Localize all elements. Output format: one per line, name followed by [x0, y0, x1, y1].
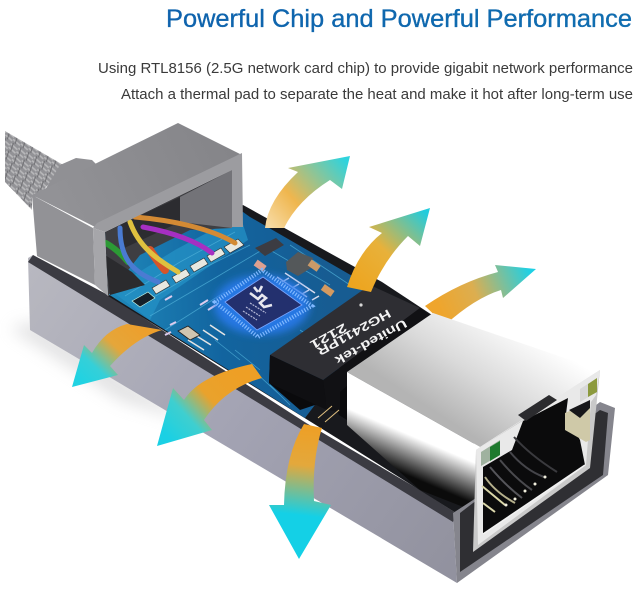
network transformer block	[269, 285, 430, 420]
port front frame	[453, 370, 615, 583]
port opening	[483, 398, 585, 534]
latch	[518, 395, 557, 421]
surface mount components	[132, 292, 155, 307]
metal hood	[32, 123, 243, 296]
circuit board	[105, 212, 380, 418]
block label: 2121	[307, 320, 349, 352]
chip glow	[214, 275, 310, 335]
illustration: ethernet adapter	[5, 123, 615, 583]
processor chip	[215, 270, 312, 337]
block label: United-tek	[332, 316, 409, 368]
block label	[307, 306, 409, 368]
silver shield top	[347, 313, 600, 447]
title: Powerful Chip and Powerful Performance	[166, 5, 632, 33]
aluminium body side	[28, 255, 457, 583]
arrow: heat down bottom	[269, 424, 331, 559]
arrow: heat down left	[72, 324, 162, 387]
RJ45 contacts	[482, 437, 557, 512]
body dark top rim	[28, 255, 456, 522]
arrow: heat up left	[265, 156, 350, 228]
silver shield side	[347, 372, 480, 512]
block label: HG2411PR	[314, 306, 393, 359]
description line 1: Using RTL8156 (2.5G network card chip) to provide gigabit network performance	[98, 60, 633, 77]
arrow: heat up middle	[347, 208, 430, 292]
braided cable	[5, 131, 100, 210]
solder pads row	[152, 239, 244, 294]
description line 2: Attach a thermal pad to separate the heat and make it hot after long-term use	[121, 86, 633, 103]
LED indicators	[481, 440, 500, 466]
metal clip	[565, 402, 590, 442]
top edge of housing behind the board	[108, 205, 476, 513]
ground shadow	[10, 322, 200, 425]
arrow: heat up right	[425, 265, 536, 325]
arrow: heat down middle	[157, 364, 262, 446]
hood interior	[105, 170, 232, 296]
coloured wires	[106, 217, 235, 282]
silver port surround	[473, 370, 600, 552]
